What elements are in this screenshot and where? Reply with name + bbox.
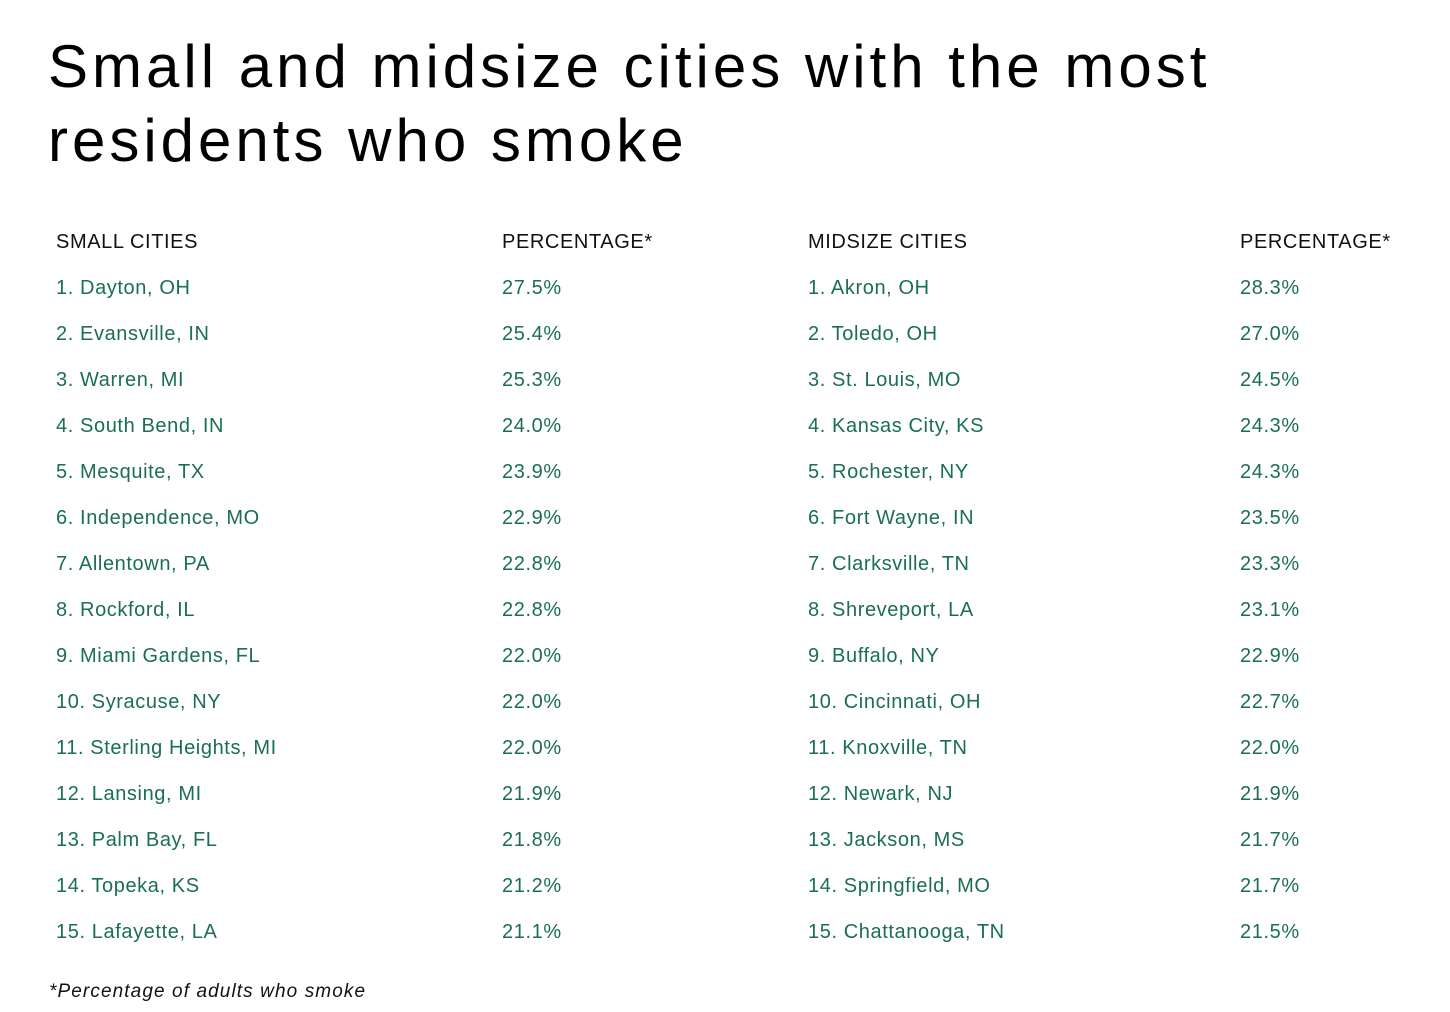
panel: small cities table: 11. Sterling Heights, MI [56,737,277,759]
panel: midsize cities table: 23.1% [1240,599,1300,621]
panel: small cities table: 21.1% [502,921,562,943]
panel: midsize cities table: 23.5% [1240,507,1300,529]
panel: midsize cities table: 24.3% [1240,461,1300,483]
panel: midsize cities table [808,231,1391,943]
panel: small cities table [56,231,653,943]
panel: small cities table: 25.3% [502,369,562,391]
panel: midsize cities table: 6. Fort Wayne, IN [808,507,974,529]
panel: midsize cities table: 22.7% [1240,691,1300,713]
panel: small cities table: 8. Rockford, IL [56,599,195,621]
panel: small cities table: 3. Warren, MI [56,369,184,391]
panel: midsize cities table: 24.3% [1240,415,1300,437]
header row midsize: PERCENTAGE* [1240,231,1391,253]
panel: small cities table: 9. Miami Gardens, FL [56,645,260,667]
panel: small cities table: 14. Topeka, KS [56,875,200,897]
panel: midsize cities table: 12. Newark, NJ [808,783,953,805]
panel: small cities table: 22.0% [502,645,562,667]
panel: small cities table: 12. Lansing, MI [56,783,202,805]
panel: midsize cities table: 21.5% [1240,921,1300,943]
panel: small cities table: 21.9% [502,783,562,805]
panel: small cities table: 24.0% [502,415,562,437]
panel: midsize cities table: 9. Buffalo, NY [808,645,939,667]
panel: midsize cities table: 27.0% [1240,323,1300,345]
panel: midsize cities table: 3. St. Louis, MO [808,369,961,391]
panel: small cities table: 22.0% [502,691,562,713]
panel: small cities table: 25.4% [502,323,562,345]
panel: small cities table: 7. Allentown, PA [56,553,210,575]
panel: small cities table: 21.8% [502,829,562,851]
panel: midsize cities table: 21.7% [1240,875,1300,897]
panel: small cities table: 2. Evansville, IN [56,323,210,345]
panel: midsize cities table: 10. Cincinnati, OH [808,691,981,713]
panel: small cities table: 1. Dayton, OH [56,277,191,299]
panel: small cities table: 27.5% [502,277,562,299]
header row small [56,231,653,253]
panel: midsize cities table: 1. Akron, OH [808,277,930,299]
panel: small cities table: 22.9% [502,507,562,529]
panel: midsize cities table: 13. Jackson, MS [808,829,965,851]
panel: midsize cities table: 28.3% [1240,277,1300,299]
panel: small cities table: 10. Syracuse, NY [56,691,221,713]
header row small: PERCENTAGE* [502,231,653,253]
panel: midsize cities table: 15. Chattanooga, TN [808,921,1005,943]
panel: midsize cities table: 5. Rochester, NY [808,461,969,483]
panel: midsize cities table: 8. Shreveport, LA [808,599,974,621]
panel: small cities table: 5. Mesquite, TX [56,461,205,483]
panel: midsize cities table: 2. Toledo, OH [808,323,938,345]
panel: small cities table: 22.0% [502,737,562,759]
panel: midsize cities table: 23.3% [1240,553,1300,575]
title: residents who smoke [48,107,688,174]
panel: midsize cities table: 24.5% [1240,369,1300,391]
panel: midsize cities table: 21.9% [1240,783,1300,805]
panel: midsize cities table: 11. Knoxville, TN [808,737,968,759]
panel: small cities table: 23.9% [502,461,562,483]
header row midsize [808,231,1391,253]
panel: small cities table: 13. Palm Bay, FL [56,829,218,851]
panel: small cities table: 4. South Bend, IN [56,415,224,437]
footnote: *Percentage of adults who smoke [49,981,366,1002]
panel: small cities table: 21.2% [502,875,562,897]
header row midsize: MIDSIZE CITIES [808,231,968,253]
panel: midsize cities table: 21.7% [1240,829,1300,851]
header row small: SMALL CITIES [56,231,198,253]
panel: midsize cities table: 4. Kansas City, KS [808,415,984,437]
panel: midsize cities table: 22.9% [1240,645,1300,667]
title [48,33,1210,174]
panel: small cities table: 22.8% [502,599,562,621]
panel: small cities table: 15. Lafayette, LA [56,921,217,943]
panel: midsize cities table: 22.0% [1240,737,1300,759]
panel: small cities table: 6. Independence, MO [56,507,260,529]
panel: small cities table: 22.8% [502,553,562,575]
panel: midsize cities table: 14. Springfield, MO [808,875,991,897]
title: Small and midsize cities with the most [48,33,1210,100]
panel: midsize cities table: 7. Clarksville, TN [808,553,970,575]
